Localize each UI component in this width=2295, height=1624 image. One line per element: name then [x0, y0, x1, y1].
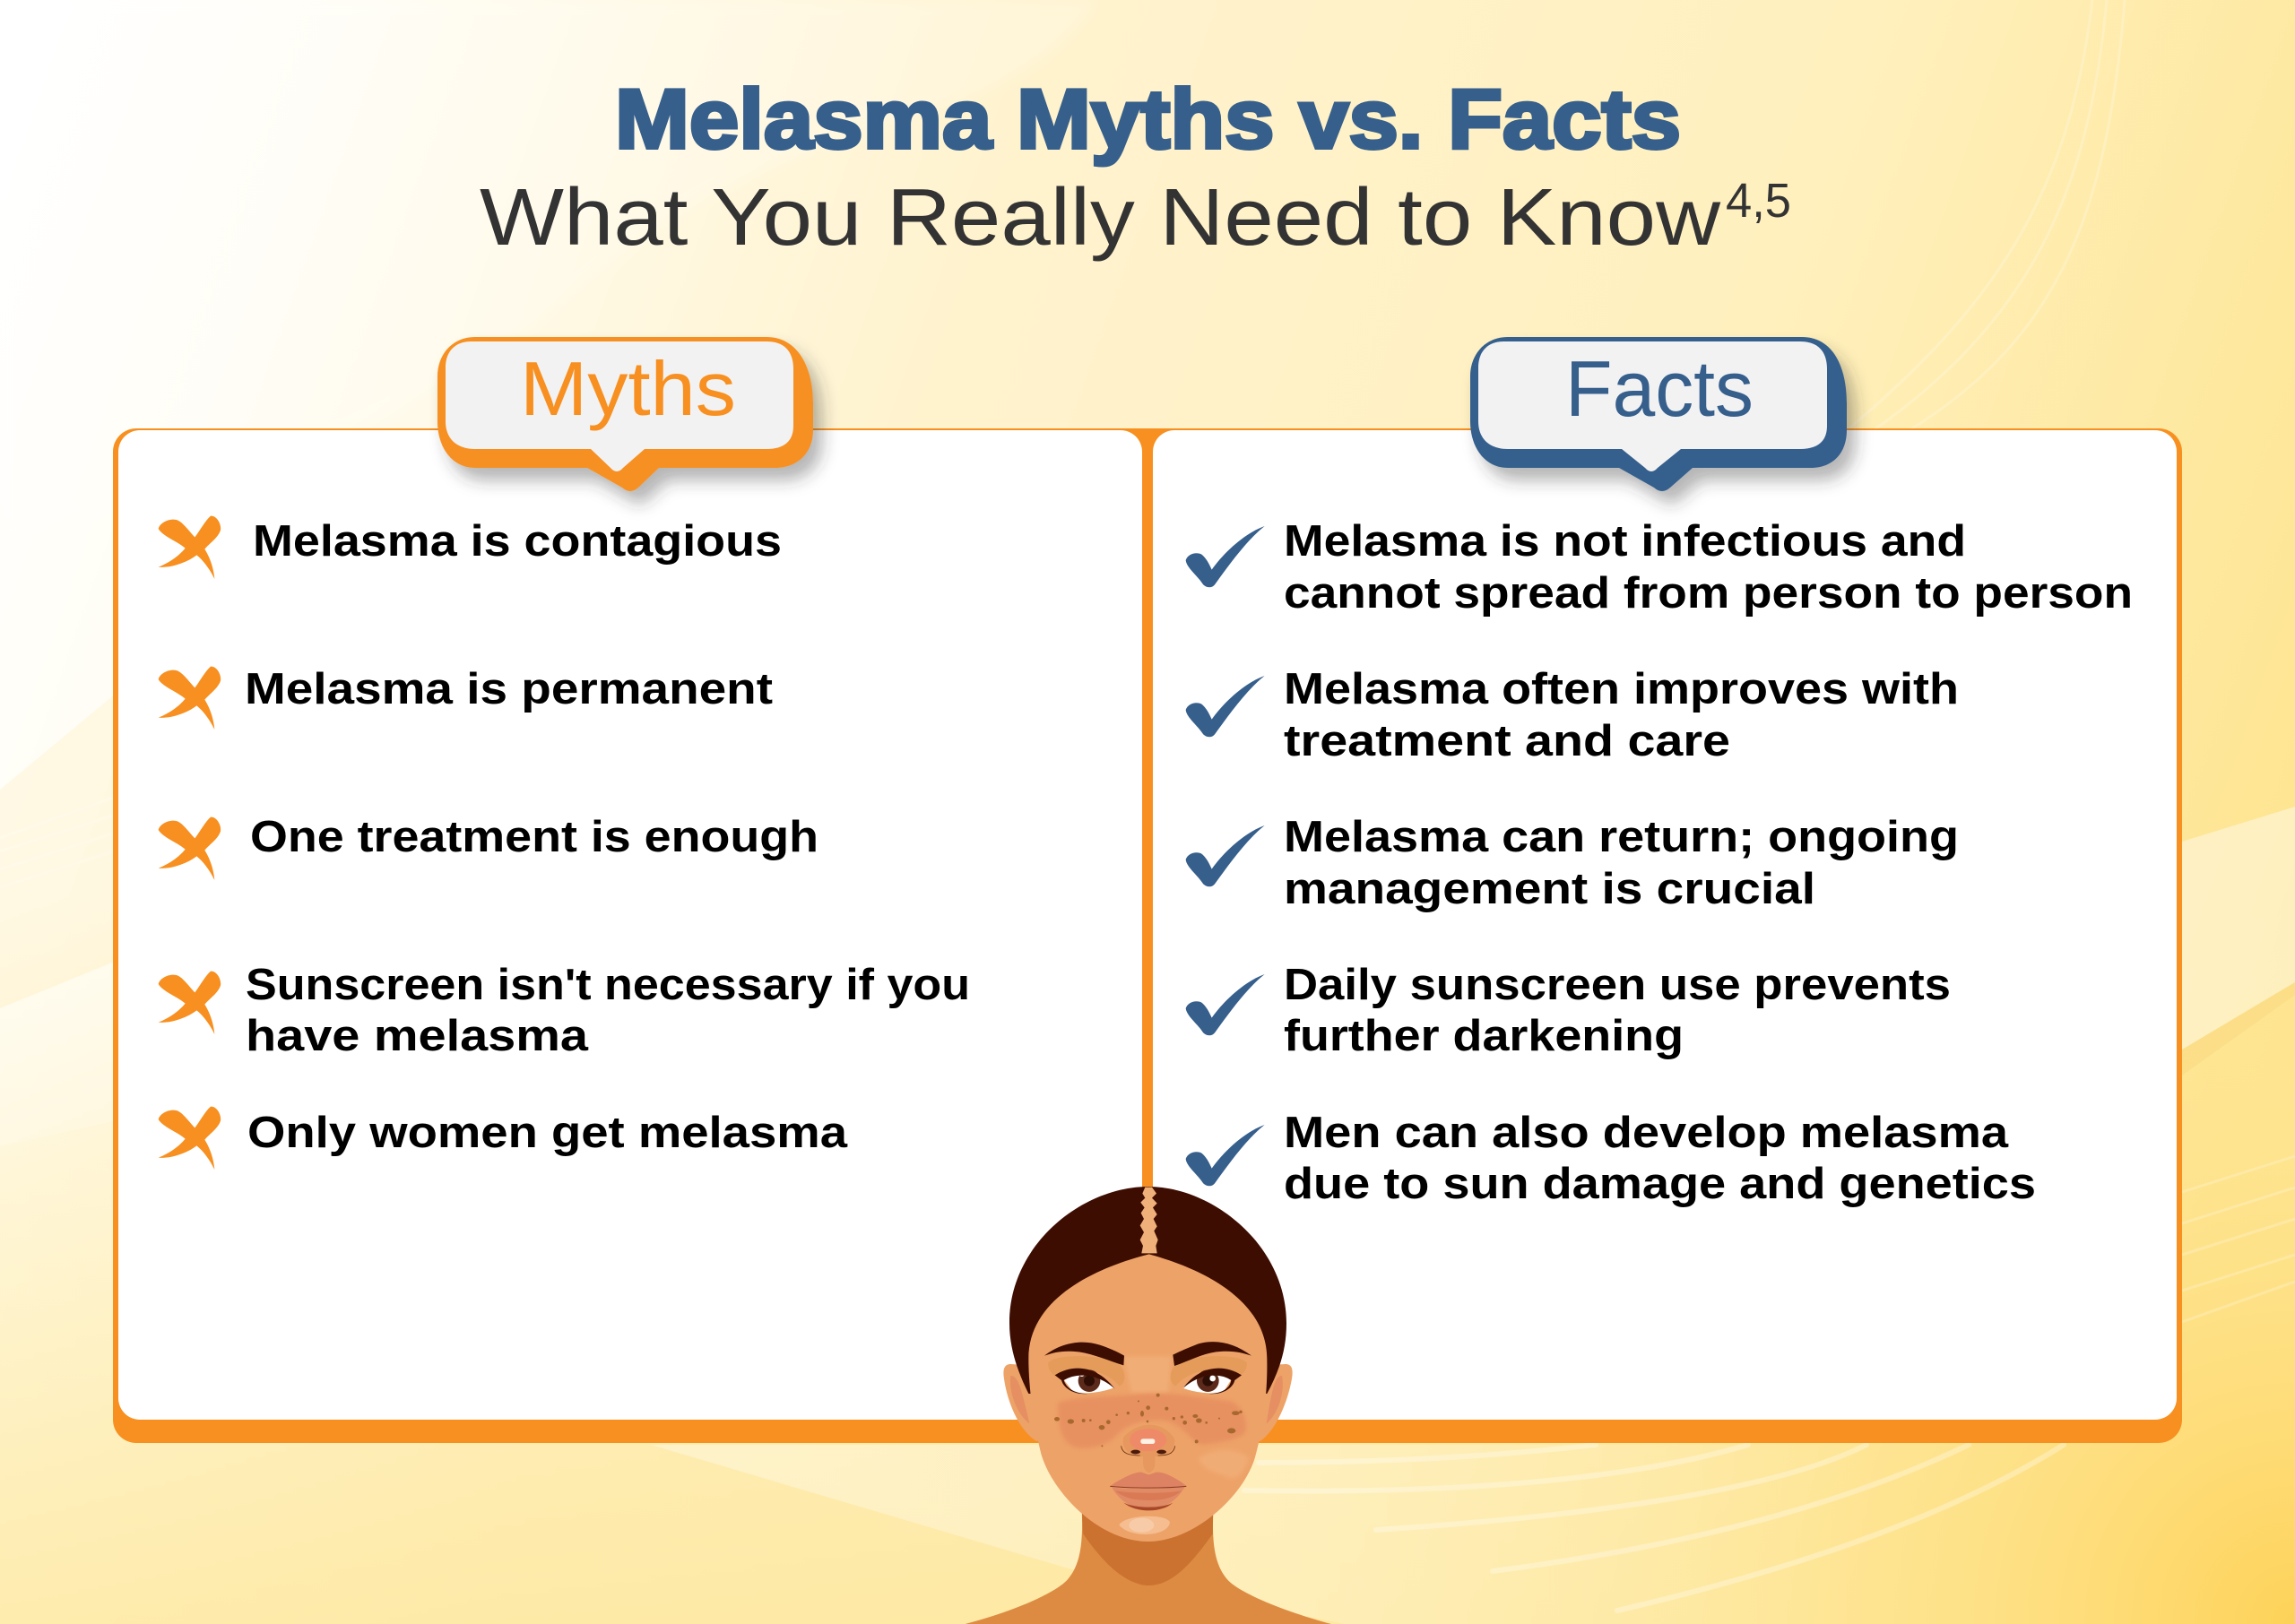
myth 4: Sunscreen isn't necessary if you: [246, 961, 970, 1009]
light patches: [1123, 1356, 1172, 1392]
fact 3: Melasma can return; ongoing: [1284, 813, 1959, 861]
hair parting: [1140, 1188, 1158, 1253]
subtitle: What You Really Need to Know: [480, 173, 1721, 263]
eyes: [1055, 1369, 1242, 1394]
fact 1: Melasma is not infectious and: [1284, 517, 1966, 566]
neck and shoulders: [966, 1508, 1331, 1624]
myth 4: [159, 961, 970, 1060]
fact 5: [1186, 1109, 2036, 1208]
references superscript: 4,5: [1726, 174, 1791, 228]
fact 4: [1186, 961, 1951, 1060]
fact 1: [1186, 517, 2133, 618]
eye shadows: [1048, 1356, 1247, 1386]
fact 3: [1186, 813, 1959, 913]
fact 2: [1186, 665, 1959, 765]
fact 3: management is crucial: [1284, 865, 1815, 913]
fact 2: Melasma often improves with: [1284, 665, 1959, 713]
mask patch: [1058, 1393, 1246, 1448]
panel: facts: [1186, 337, 2133, 1208]
myths badge: [437, 337, 813, 491]
freckles: [1054, 1394, 1243, 1447]
title line 1: Melasma Myths vs. Facts: [615, 72, 1681, 166]
fact 5: due to sun damage and genetics: [1284, 1160, 2036, 1208]
fact 4: further darkening: [1284, 1012, 1684, 1060]
facts badge: [1470, 337, 1847, 491]
illustration: woman's face with melasma: [966, 1187, 1331, 1624]
facts badge: Facts: [1565, 344, 1754, 433]
myth 1: Melasma is contagious: [253, 517, 782, 566]
ears: [1003, 1364, 1293, 1441]
lips: [1110, 1473, 1186, 1510]
myths badge: Myths: [520, 347, 736, 432]
fact 2: treatment and care: [1284, 717, 1730, 765]
eyebrows: [1044, 1342, 1251, 1366]
hair: [1009, 1187, 1286, 1394]
fact 5: Men can also develop melasma: [1284, 1109, 2009, 1157]
fact 4: Daily sunscreen use prevents: [1284, 961, 1951, 1009]
panel frame: [113, 428, 2182, 1443]
myth 1: [159, 516, 782, 579]
panel: myths: [159, 337, 970, 1170]
myth 3: [159, 813, 818, 880]
myth 3: One treatment is enough: [250, 813, 818, 861]
myth 2: Melasma is permanent: [245, 665, 773, 713]
myth 5: [159, 1107, 848, 1170]
face: [1028, 1188, 1267, 1542]
myth 4: have melasma: [246, 1012, 589, 1060]
nose: [1122, 1425, 1175, 1473]
fact 1: cannot spread from person to person: [1284, 569, 2133, 618]
myth 5: Only women get melasma: [247, 1109, 848, 1157]
myth 2: [159, 665, 773, 730]
title: [480, 72, 1791, 263]
